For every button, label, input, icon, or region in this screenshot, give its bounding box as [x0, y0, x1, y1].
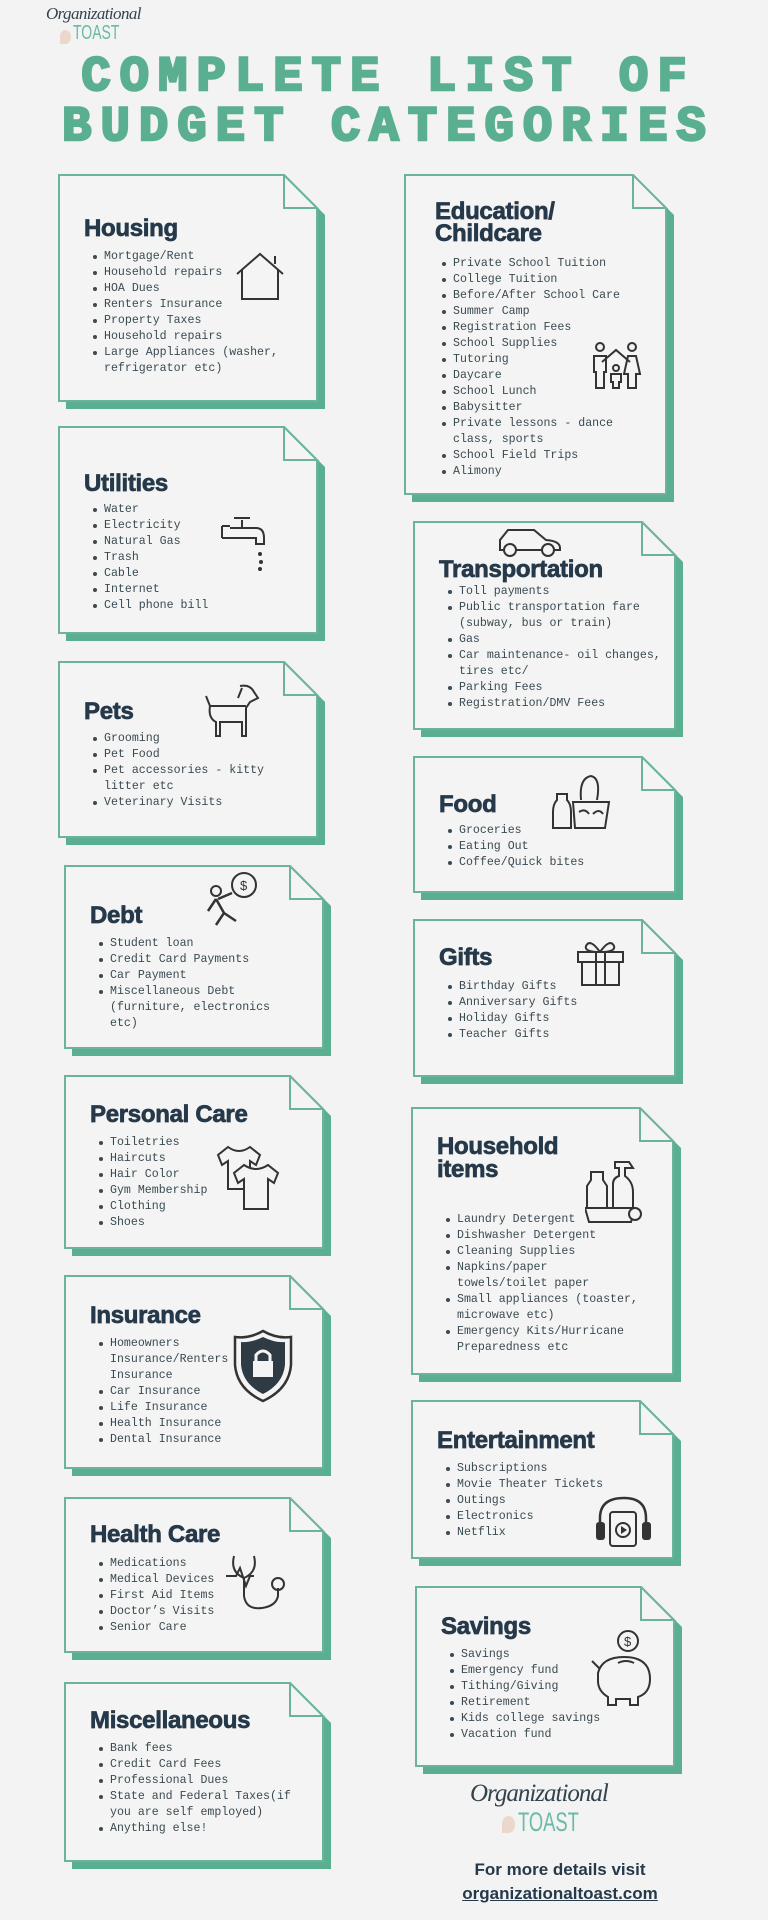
list: insurance: Homeowners — [110, 1337, 180, 1350]
list: miscellaneous: you are self employed) — [110, 1806, 263, 1819]
list: personal care: Clothing — [110, 1200, 166, 1213]
list: personal care: Hair Color — [110, 1168, 180, 1181]
list: savings — [450, 1647, 600, 1743]
list: insurance: Insurance — [110, 1369, 173, 1382]
list: entertainment — [446, 1461, 603, 1541]
list: housing: Property Taxes — [104, 314, 201, 327]
list: housing: Large Appliances (washer, — [104, 346, 278, 359]
title: BUDGET CATEGORIES — [62, 99, 715, 155]
list: transportation: Gas — [459, 633, 480, 646]
list: debt: Credit Card Payments — [110, 953, 249, 966]
heading: education — [435, 198, 556, 247]
list: education: Daycare — [453, 369, 502, 382]
title: COMPLETE LIST OF — [81, 49, 696, 105]
icon: dog — [205, 684, 260, 737]
list: miscellaneous: Professional Dues — [110, 1774, 228, 1787]
list: debt: Car Payment — [110, 969, 187, 982]
list: housing — [93, 250, 278, 375]
list: education: Registration Fees — [453, 321, 571, 334]
panel: miscellaneous — [64, 1682, 331, 1869]
list: transportation: (subway, bus or train) — [459, 617, 612, 630]
panel: food — [413, 756, 683, 900]
panel: gifts — [413, 919, 683, 1084]
logo bottom — [470, 1780, 606, 1840]
list: personal care: Shoes — [110, 1216, 145, 1229]
panel: housing — [58, 174, 325, 409]
list: entertainment: Subscriptions — [457, 1462, 547, 1475]
heading: transportation: Transportation — [439, 556, 603, 583]
heading: health care: Health Care — [90, 1521, 220, 1548]
list: transportation: Car maintenance- oil changes, — [459, 649, 661, 662]
list: entertainment: Outings — [457, 1494, 506, 1507]
panel: personal care — [64, 1075, 331, 1256]
list: health care: Medical Devices — [110, 1573, 214, 1586]
heading: education: Childcare — [435, 220, 542, 247]
list: transportation — [448, 585, 661, 710]
footer text — [420, 1858, 700, 1906]
list: household items: Dishwasher Detergent — [457, 1229, 596, 1242]
list: health care — [99, 1557, 214, 1634]
icon: debt person with weight — [207, 872, 257, 926]
list: pets: Veterinary Visits — [104, 796, 222, 809]
icon: headphones video — [594, 1492, 653, 1550]
list: miscellaneous — [99, 1742, 291, 1835]
logo top — [46, 4, 142, 44]
list: education: Summer Camp — [453, 305, 530, 318]
heading: debt: Debt — [90, 902, 142, 929]
footer text: organizationaltoast.com — [462, 1884, 658, 1903]
logo bottom: Organizational — [470, 1780, 608, 1807]
panel: debt — [64, 865, 331, 1056]
heading: entertainment: Entertainment — [437, 1427, 594, 1454]
heading: pets: Pets — [84, 698, 134, 725]
heading: gifts: Gifts — [439, 944, 492, 971]
list: food: Coffee/Quick bites — [459, 856, 584, 869]
list: pets: Grooming — [104, 732, 160, 745]
list: household items: Laundry Detergent — [457, 1213, 575, 1226]
list: transportation: Public transportation fare — [459, 601, 640, 614]
list: pets: Pet accessories - kitty — [104, 764, 264, 777]
logo top: TOAST — [73, 22, 119, 44]
footer text: For more details visit — [474, 1860, 646, 1879]
panel: utilities — [58, 426, 325, 641]
icon: stethoscope — [226, 1556, 285, 1610]
list: health care: Medications — [110, 1557, 187, 1570]
list: savings: Emergency fund — [461, 1664, 558, 1677]
logo bottom: TOAST — [518, 1807, 579, 1837]
heading: housing: Housing — [84, 215, 178, 242]
list: entertainment: Netflix — [457, 1526, 506, 1539]
list: insurance: Health Insurance — [110, 1417, 221, 1430]
panel: household items — [411, 1107, 681, 1382]
list: housing: Mortgage/Rent — [104, 250, 194, 263]
list: personal care: Toiletries — [110, 1136, 180, 1149]
list: education: College Tuition — [453, 273, 557, 286]
list: insurance: Car Insurance — [110, 1385, 200, 1398]
list: utilities: Internet — [104, 583, 160, 596]
list: entertainment: Electronics — [457, 1510, 534, 1523]
list: health care: Senior Care — [110, 1621, 187, 1634]
list: utilities: Natural Gas — [104, 535, 181, 548]
panel: education/childcare — [404, 174, 674, 502]
list: insurance — [99, 1337, 228, 1446]
list: household items: towels/toilet paper — [457, 1277, 589, 1290]
logo top: Organizational — [46, 4, 141, 23]
list: household items: Preparedness etc — [457, 1341, 568, 1354]
heading: utilities: Utilities — [84, 470, 168, 497]
list: utilities — [93, 503, 208, 612]
list: housing: Household repairs — [104, 330, 222, 343]
list: savings: Kids college savings — [461, 1712, 600, 1725]
list: pets: Pet Food — [104, 748, 160, 761]
heading: household items: Household — [437, 1133, 558, 1160]
list: debt — [99, 937, 270, 1030]
list: entertainment: Movie Theater Tickets — [457, 1478, 603, 1491]
list: housing: Household repairs — [104, 266, 222, 279]
list: debt: etc) — [110, 1017, 138, 1030]
list: housing: Renters Insurance — [104, 298, 222, 311]
list: gifts: Holiday Gifts — [459, 1012, 549, 1025]
icon: car — [499, 529, 561, 557]
list: personal care: Gym Membership — [110, 1184, 207, 1197]
list: personal care — [99, 1136, 207, 1229]
heading: insurance: Insurance — [90, 1302, 201, 1329]
list: education: Private School Tuition — [453, 257, 606, 270]
list: food — [448, 824, 584, 869]
icon: gift box — [577, 942, 624, 986]
list: gifts: Teacher Gifts — [459, 1028, 549, 1041]
panel: savings — [415, 1586, 683, 1775]
panel: insurance — [64, 1275, 331, 1476]
list: education: Alimony — [453, 465, 502, 478]
icon: groceries — [552, 775, 610, 829]
list: miscellaneous: Anything else! — [110, 1822, 207, 1835]
list: housing: HOA Dues — [104, 282, 160, 295]
list: housing: refrigerator etc) — [104, 362, 222, 375]
list: miscellaneous: State and Federal Taxes(if — [110, 1790, 291, 1803]
list: pets: litter etc — [104, 780, 174, 793]
list: education: School Lunch — [453, 385, 536, 398]
list: debt: Student loan — [110, 937, 194, 950]
list: utilities: Water — [104, 503, 139, 516]
panel: entertainment — [411, 1400, 682, 1567]
icon: house — [236, 252, 284, 300]
icon: cleaning supplies — [585, 1158, 643, 1223]
list: health care: Doctor’s Visits — [110, 1605, 214, 1618]
panel: transportation — [413, 521, 683, 737]
panel: pets — [58, 661, 325, 845]
heading: education: Education/ — [435, 198, 555, 225]
icon: shirts — [216, 1146, 280, 1210]
icon: shield lock — [234, 1330, 292, 1402]
list: household items: Small appliances (toaster, — [457, 1293, 638, 1306]
list: education: School Supplies — [453, 337, 557, 350]
list: food: Eating Out — [459, 840, 529, 853]
icon: family — [593, 342, 642, 389]
icon: debt person with weight: $ — [240, 878, 248, 893]
list: transportation: Toll payments — [459, 585, 549, 598]
list: household items: Napkins/paper — [457, 1261, 547, 1274]
list: education: Tutoring — [453, 353, 509, 366]
icon: faucet — [221, 517, 265, 571]
list: debt: Miscellaneous Debt — [110, 985, 235, 998]
list: gifts — [448, 980, 577, 1041]
list: utilities: Electricity — [104, 519, 181, 532]
list: savings: Vacation fund — [461, 1728, 551, 1741]
list: food: Groceries — [459, 824, 522, 837]
list: household items: Cleaning Supplies — [457, 1245, 575, 1258]
heading: food: Food — [439, 791, 496, 818]
heading: miscellaneous: Miscellaneous — [90, 1707, 250, 1734]
list: education: School Field Trips — [453, 449, 578, 462]
icon: piggy bank: $ — [624, 1634, 632, 1649]
list: gifts: Birthday Gifts — [459, 980, 556, 993]
list: transportation: Parking Fees — [459, 681, 542, 694]
list: transportation: Registration/DMV Fees — [459, 697, 605, 710]
icon: piggy bank — [588, 1629, 655, 1707]
list: savings: Savings — [461, 1648, 510, 1661]
list: insurance: Life Insurance — [110, 1401, 207, 1414]
list: utilities: Cell phone bill — [104, 599, 208, 612]
heading: household items — [437, 1133, 558, 1183]
list: miscellaneous: Bank fees — [110, 1742, 173, 1755]
list: health care: First Aid Items — [110, 1589, 214, 1602]
list: household items: microwave etc) — [457, 1309, 554, 1322]
list: gifts: Anniversary Gifts — [459, 996, 577, 1009]
list: education: Babysitter — [453, 401, 523, 414]
list: household items — [446, 1212, 638, 1356]
list: household items: Emergency Kits/Hurricane — [457, 1325, 624, 1338]
list: education: Private lessons - dance — [453, 417, 613, 430]
heading: household items: items — [437, 1156, 498, 1183]
list: insurance: Insurance/Renters — [110, 1353, 228, 1366]
heading: savings: Savings — [441, 1613, 531, 1640]
list: education: Before/After School Care — [453, 289, 620, 302]
list: education — [442, 257, 620, 478]
list: savings: Tithing/Giving — [461, 1680, 558, 1693]
list: utilities: Cable — [104, 567, 139, 580]
list: savings: Retirement — [461, 1696, 531, 1709]
list: utilities: Trash — [104, 551, 139, 564]
list: pets — [93, 732, 264, 809]
list: miscellaneous: Credit Card Fees — [110, 1758, 221, 1771]
list: insurance: Dental Insurance — [110, 1433, 221, 1446]
list: transportation: tires etc/ — [459, 665, 529, 678]
title — [62, 49, 715, 155]
list: personal care: Haircuts — [110, 1152, 166, 1165]
list: education: class, sports — [453, 433, 543, 446]
panel: health care — [64, 1497, 331, 1660]
list: debt: (furniture, electronics — [110, 1001, 270, 1014]
heading: personal care: Personal Care — [90, 1101, 248, 1128]
